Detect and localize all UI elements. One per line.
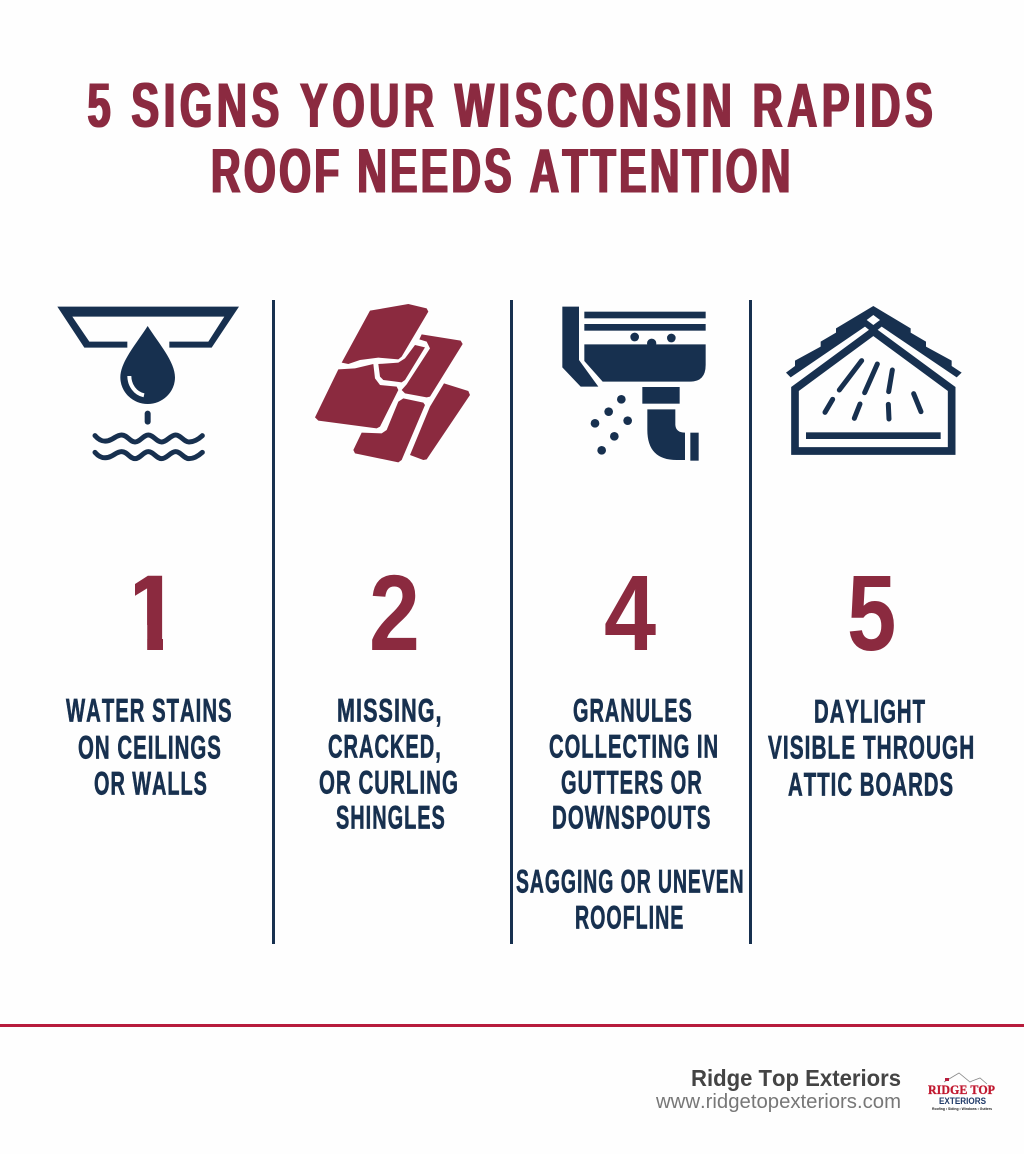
number 1: 1 [122,553,182,674]
label: sign 4: COLLECTING IN [549,729,719,765]
label: sign 1: OR WALLS [94,766,208,802]
label: sign 4: GRANULES [573,693,693,729]
label: sign 4 [516,693,745,936]
logo [928,1073,995,1111]
title: ROOF NEEDS ATTENTION [211,137,794,207]
icon: cracked shingles [315,304,470,462]
label: sign 2 [319,692,459,836]
icon: gutter with granules [562,307,706,461]
label: sign 2: MISSING, [337,692,443,729]
footer company name: Ridge Top Exteriors [691,1065,901,1091]
footer rule [0,1024,1024,1027]
logo: RIDGE TOP [928,1083,995,1097]
label: sign 2: CRACKED, [328,729,442,765]
label: sign 1: ON CEILINGS [78,730,222,766]
number 2: 2 [369,553,420,674]
number 5: 5 [847,553,896,673]
label: sign 4: GUTTERS OR [561,765,703,801]
label: sign 5: VISIBLE THROUGH [768,730,975,766]
icon: attic with daylight [786,306,962,451]
label: sign 2: SHINGLES [336,800,446,836]
label: sign 4: SAGGING OR UNEVEN [516,863,745,900]
title: 5 SIGNS YOUR WISCONSIN RAPIDS [88,72,937,141]
title [88,72,937,207]
label: sign 1 [66,693,233,802]
label: sign 1: WATER STAINS [66,693,233,729]
label: sign 4: DOWNSPOUTS [552,800,711,836]
label: sign 4: ROOFLINE [575,900,684,936]
label: sign 5: DAYLIGHT [814,694,926,730]
icon: water drop from ceiling [57,307,239,459]
label: sign 2: OR CURLING [319,765,459,801]
label: sign 5 [768,694,975,803]
number 4: 4 [604,553,656,673]
logo: EXTERIORS [939,1096,986,1107]
footer website: www.ridgetopexteriors.com [655,1091,901,1113]
logo: Roofing • Siding • Windows • Gutters [932,1106,993,1111]
label: sign 5: ATTIC BOARDS [788,767,954,803]
